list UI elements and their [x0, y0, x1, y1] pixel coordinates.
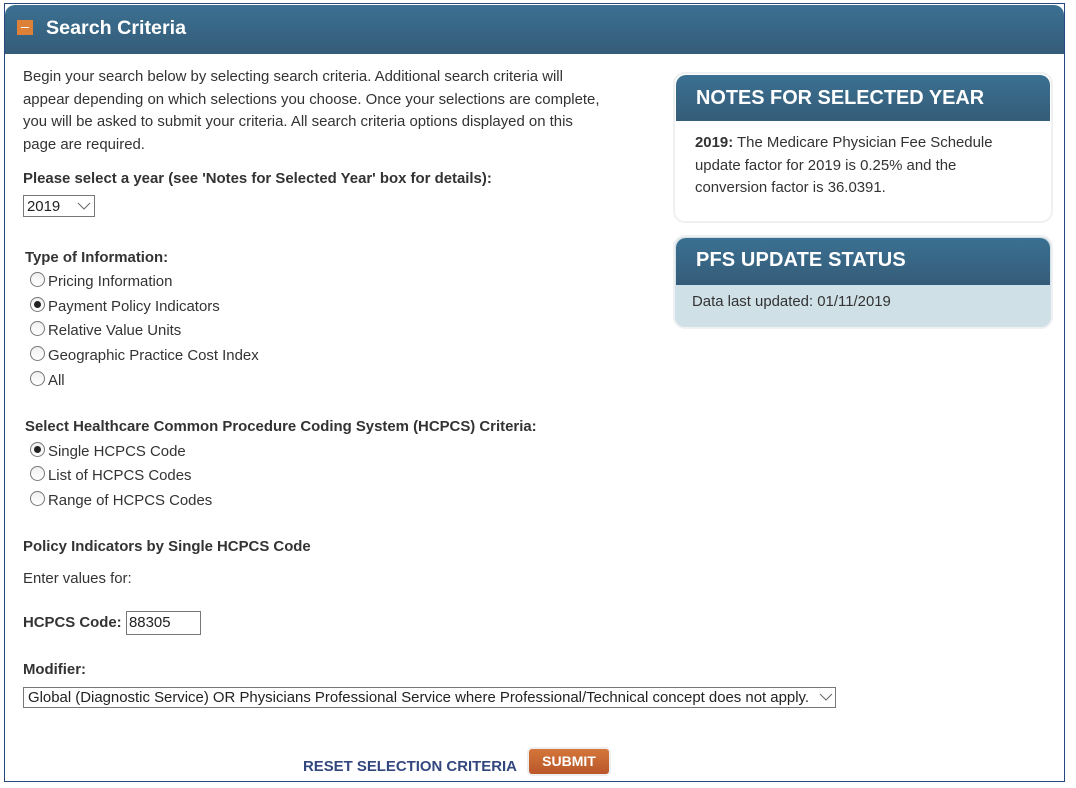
radio: all: All	[48, 372, 65, 389]
radio: list of hcpcs codes: List of HCPCS Codes	[48, 467, 191, 484]
icon: collapse minus	[17, 20, 33, 35]
radio: all	[30, 371, 65, 389]
status header: PFS UPDATE STATUS	[696, 249, 906, 271]
submit button: SUBMIT	[542, 753, 596, 769]
panel: pfs update status	[673, 235, 1053, 329]
notes body	[695, 134, 993, 196]
group heading: Select Healthcare Common Procedure Coding System (HCPCS) Criteria:	[25, 418, 537, 435]
intro text: page are required.	[23, 136, 145, 153]
reset link: RESET SELECTION CRITERIA	[303, 758, 517, 775]
intro text: appear depending on which selections you choose. Once your selections are complete,	[23, 91, 600, 108]
intro text: Begin your search below by selecting search criteria. Additional search criteria will	[23, 68, 563, 85]
intro text: you will be asked to submit your criteria. All search criteria options displayed on this	[23, 113, 573, 130]
notes body: conversion factor is 36.0391.	[695, 179, 886, 196]
hcpcs code label: HCPCS Code:	[23, 614, 122, 631]
year select	[23, 195, 95, 217]
intro text	[23, 68, 600, 153]
enter values text: Enter values for:	[23, 570, 132, 587]
hcpcs criteria group	[25, 418, 537, 509]
icon: dropdown chevron	[820, 694, 832, 701]
submit button	[529, 749, 609, 774]
year label: Please select a year (see 'Notes for Selected Year' box for details):	[23, 170, 492, 187]
year select: 2019	[27, 198, 60, 215]
notes body: 2019: The Medicare Physician Fee Schedule	[695, 134, 993, 151]
radio: payment policy indicators: Payment Policy Indicators	[48, 298, 220, 315]
panel header: search criteria	[5, 5, 1064, 54]
panel title: Search Criteria	[46, 17, 186, 39]
radio: single hcpcs code: Single HCPCS Code	[48, 443, 186, 460]
notes header	[676, 75, 1050, 121]
modifier label: Modifier:	[23, 661, 86, 678]
icon: dropdown chevron	[78, 202, 90, 210]
group heading: Type of Information:	[25, 249, 168, 266]
notes body: update factor for 2019 is 0.25% and the	[695, 157, 956, 174]
panel: notes for selected year	[673, 72, 1053, 223]
modifier select: Global (Diagnostic Service) OR Physicians Professional Service where Professional/Technical concept does not apply.	[28, 689, 809, 706]
radio: relative value units: Relative Value Units	[48, 322, 181, 339]
hcpcs code input: 88305	[129, 614, 170, 631]
hcpcs code input	[126, 611, 201, 635]
status text: Data last updated: 01/11/2019	[692, 293, 891, 310]
radio: geographic practice cost index: Geographic Practice Cost Index	[48, 347, 259, 364]
radio: range of hcpcs codes: Range of HCPCS Codes	[48, 492, 212, 509]
notes header: NOTES FOR SELECTED YEAR	[696, 87, 984, 109]
radio: pricing information: Pricing Information	[48, 273, 172, 290]
status header	[676, 238, 1050, 285]
policy indicators heading: Policy Indicators by Single HCPCS Code	[23, 538, 311, 555]
type of information group	[25, 249, 259, 389]
